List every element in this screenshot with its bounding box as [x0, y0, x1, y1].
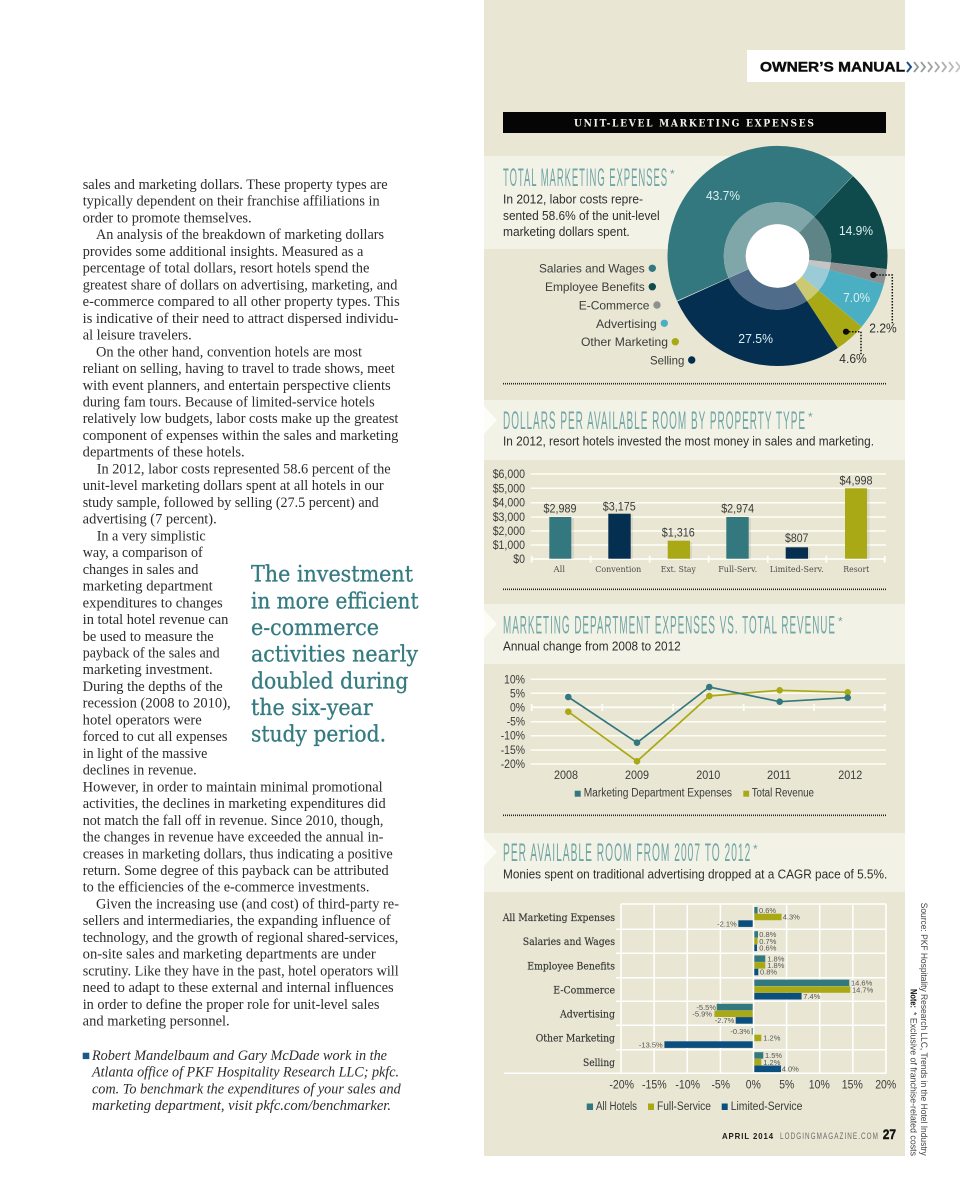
- bar chart: dollars per room by property type: $1,316: [662, 528, 695, 540]
- row: employee benefits: 1.8%: [767, 954, 785, 963]
- pie legend: [539, 262, 695, 368]
- row: all marketing expenses: -2.1%: [717, 919, 737, 928]
- row: e-commerce: [553, 979, 874, 1001]
- left article text: order to promote themselves.: [83, 210, 252, 226]
- row: salaries and wages: 0.8%: [759, 930, 777, 939]
- bar chart: dollars per room by property type: Resort: [843, 565, 870, 575]
- left article text: creases in marketing dollars, thus indicating a positive: [83, 846, 393, 862]
- left article text: advertising (7 percent).: [83, 512, 217, 528]
- intro text: total marketing expenses: In 2012, labor costs repre-: [503, 192, 643, 206]
- line chart: expenses vs revenue: 10%: [504, 674, 525, 686]
- pie legend: Salaries and Wages: [539, 262, 645, 276]
- line chart legend: [575, 788, 814, 800]
- row: salaries and wages: 0.7%: [759, 937, 777, 946]
- pie legend: Advertising: [596, 317, 657, 331]
- left article text: marketing investment.: [83, 662, 213, 678]
- horizontal bar legend: Limited-Service: [731, 1101, 802, 1113]
- bar chart: dollars per room by property type: Ext. Stay: [661, 565, 696, 575]
- row: e-commerce: 7.4%: [803, 992, 821, 1001]
- intro text: total marketing expenses: [503, 192, 660, 239]
- pull quote: The investment: [251, 563, 413, 588]
- bar chart: dollars per room by property type: $6,000: [493, 469, 525, 481]
- pie chart: marketing expenses: 43.7%: [706, 189, 740, 203]
- row: e-commerce: 14.6%: [851, 979, 873, 988]
- left article text: greatest share of dollars on advertising, marketing, and: [83, 277, 398, 293]
- left article text: is indicative of their need to attract dispersed individu-: [83, 311, 399, 327]
- row: all marketing expenses: 4.3%: [783, 913, 800, 922]
- bar chart: dollars per room by property type: $1,000: [493, 540, 525, 552]
- sidebar source note: * Exclusive of franchise-related costs: [908, 1012, 919, 1156]
- bar chart: dollars per room by property type: $3,175: [603, 501, 636, 513]
- row: advertising: -5.9%: [692, 1010, 712, 1018]
- line chart: expenses vs revenue: 2010: [696, 770, 720, 782]
- left article text: However, in order to maintain minimal promotional: [83, 779, 383, 795]
- heading: total marketing expenses: [503, 164, 675, 192]
- left article text: during fam tours. Because of limited-service hotels: [83, 394, 375, 410]
- left article text: in total hotel revenue can: [83, 612, 228, 628]
- left article text: An analysis of the breakdown of marketing dollars: [96, 227, 384, 243]
- left article text: changes in sales and: [83, 562, 199, 578]
- left article text: need to adapt to these external and internal influences: [83, 980, 394, 996]
- left article text: provides some additional insights. Measured as a: [83, 244, 364, 260]
- left article text: During the depths of the: [83, 679, 223, 695]
- pie chart: marketing expenses: 27.5%: [738, 332, 773, 346]
- horizontal bar legend: [587, 1101, 802, 1113]
- row: salaries and wages: 0.6%: [759, 944, 777, 952]
- row: all marketing expenses: All Marketing Expenses: [502, 913, 615, 924]
- row: selling: [583, 1051, 799, 1074]
- band: per available room header: [484, 833, 905, 892]
- left article text: way, a comparison of: [83, 545, 203, 561]
- line chart legend: Marketing Department Expenses: [584, 788, 732, 800]
- line chart legend: Total Revenue: [752, 788, 814, 800]
- footer: date, site and page number: 27: [883, 1126, 896, 1142]
- left article text: e-commerce compared to all other property types. This: [83, 294, 400, 310]
- bar chart: dollars per room by property type: $5,000: [493, 483, 525, 495]
- left article text: be used to measure the: [83, 629, 214, 645]
- sidebar source note: Source: PKF Hospitality Research LLC, Trends in the Hotel Industry: [918, 903, 929, 1156]
- x axis labels: 0%: [746, 1080, 761, 1092]
- left article text: scrutiny. Like they have in the past, hotel operators will: [83, 963, 399, 979]
- author bio: Atlanta office of PKF Hospitality Research LLC; pkfc.: [91, 1065, 399, 1081]
- row: advertising: -5.5%: [696, 1003, 716, 1012]
- left article text: payback of the sales and: [83, 646, 220, 662]
- x axis labels: 10%: [809, 1080, 830, 1092]
- left article text: sales and marketing dollars. These property types are: [83, 177, 388, 193]
- left article text: In 2012, labor costs represented 58.6 percent of the: [97, 461, 391, 477]
- footer: date, site and page number: [722, 1126, 896, 1142]
- horizontal bar legend: Full-Service: [657, 1101, 711, 1113]
- left article text: with event planners, and entertain perspective clients: [83, 378, 391, 394]
- row: advertising: -2.7%: [715, 1016, 735, 1025]
- line chart: expenses vs revenue: -10%: [501, 731, 525, 743]
- author bio: marketing department, visit pkfc.com/benchmarker.: [92, 1098, 391, 1114]
- row: selling: Selling: [583, 1058, 616, 1069]
- left article text: declines in revenue.: [83, 763, 197, 779]
- line chart: expenses vs revenue: -20%: [501, 759, 525, 771]
- callout: other marketing 4.6%: 4.6%: [839, 352, 867, 366]
- panel: right sidebar background: [484, 0, 905, 1156]
- left article text: forced to cut all expenses: [83, 729, 228, 745]
- left article text: and marketing personnel.: [83, 1014, 230, 1030]
- pie chart: marketing expenses: 7.0%: [843, 291, 870, 305]
- x axis labels: 5%: [779, 1080, 794, 1092]
- bar chart: dollars per room by property type: [493, 469, 886, 575]
- row: employee benefits: [527, 954, 785, 977]
- left article text: unit-level marketing dollars spent at all hotels in our: [83, 478, 384, 494]
- sidebar source note: Note:: [908, 989, 919, 1008]
- x axis labels: -10%: [675, 1080, 700, 1092]
- bar chart: dollars per room by property type: $807: [785, 533, 808, 545]
- pie chart: marketing expenses: 14.9%: [839, 224, 873, 238]
- tab: owner's manual: OWNER’S MANUAL: [760, 58, 905, 74]
- intro text: total marketing expenses: sented 58.6% of the unit-level: [503, 209, 660, 223]
- line chart: expenses vs revenue: 2009: [625, 770, 649, 782]
- left article text: technology, and the growth of regional shared-services,: [83, 930, 398, 946]
- left article text: not match the fall off in revenue. Since 2010, though,: [83, 813, 383, 829]
- left article text: in light of the massive: [83, 746, 207, 762]
- line chart: expenses vs revenue: 2008: [554, 770, 578, 782]
- left article text: [83, 177, 400, 1030]
- pull quote: in more efficient: [251, 589, 419, 614]
- heading: per available room: [503, 839, 758, 867]
- callout: other marketing 4.6%: [839, 329, 867, 366]
- footer: date, site and page number: LODGINGMAGAZINE.COM: [780, 1131, 879, 1141]
- left article text: activities, the declines in marketing expenditures did: [83, 796, 386, 812]
- row: salaries and wages: [523, 930, 777, 952]
- bar chart: dollars per room by property type: All: [553, 565, 565, 575]
- bar chart: dollars per room by property type: Full-Serv.: [718, 565, 757, 575]
- band: total marketing expenses header: [484, 156, 905, 249]
- subheading: dollars per available room: In 2012, resort hotels invested the most money in sales and marketing.: [503, 435, 874, 449]
- row: other marketing: Other Marketing: [536, 1034, 616, 1045]
- left article text: typically dependent on their franchise affiliations in: [83, 194, 380, 210]
- x axis labels: -20%: [609, 1080, 634, 1092]
- row: other marketing: -0.3%: [730, 1027, 750, 1036]
- text: TOTAL MARKETING EXPENSES: [503, 164, 668, 192]
- pie legend: Selling: [650, 354, 684, 368]
- x axis labels: -15%: [642, 1080, 667, 1092]
- bar chart: dollars per room by property type: Limited-Serv.: [770, 565, 824, 575]
- left article text: to the efficiencies of the e-commerce investments.: [83, 880, 369, 896]
- bar chart: dollars per room by property type: $4,000: [493, 498, 525, 510]
- pull quote: doubled during: [251, 669, 408, 694]
- callout: e-commerce 2.2%: [869, 272, 897, 336]
- band: marketing vs revenue header: [484, 604, 905, 664]
- row: selling: 1.2%: [763, 1058, 781, 1067]
- pull quote: [251, 563, 419, 748]
- row: advertising: Advertising: [559, 1009, 616, 1020]
- bar chart: dollars per room by property type: $3,000: [493, 512, 525, 524]
- bar chart: dollars per room by property type: $2,989: [544, 504, 576, 516]
- left article text: on-site sales and marketing departments are under: [83, 947, 376, 963]
- left article text: sellers and intermediaries, the expanding influence of: [83, 913, 391, 929]
- pull quote: study period.: [251, 723, 386, 748]
- x axis labels: [609, 1080, 896, 1092]
- bar chart: dollars per room by property type: $2,974: [721, 503, 755, 515]
- left article text: reliant on selling, having to travel to trade shows, meet: [83, 361, 395, 377]
- callout: e-commerce 2.2%: 2.2%: [869, 322, 897, 336]
- x axis labels: 15%: [842, 1080, 863, 1092]
- line chart: expenses vs revenue: -15%: [501, 745, 525, 757]
- line chart: expenses vs revenue: 5%: [510, 688, 525, 700]
- heading: dollars per available room: [503, 407, 813, 435]
- line chart: expenses vs revenue: -5%: [507, 717, 525, 729]
- row: employee benefits: 0.8%: [760, 968, 777, 977]
- left article text: expenditures to changes: [83, 595, 223, 611]
- row: all marketing expenses: [502, 906, 800, 928]
- row: e-commerce: E-Commerce: [553, 985, 615, 996]
- author bio: [83, 1048, 401, 1114]
- line chart: expenses vs revenue: 2011: [767, 770, 791, 782]
- sidebar source note: [908, 903, 929, 1156]
- title bar: unit-level marketing expenses: UNIT-LEVEL MARKETING EXPENSES: [574, 117, 816, 129]
- left article text: al leisure travelers.: [83, 328, 192, 344]
- left article text: recession (2008 to 2010),: [83, 696, 231, 712]
- line chart: expenses vs revenue: 0%: [510, 702, 525, 714]
- band: dollars per room header: [484, 400, 905, 460]
- row: other marketing: -13.5%: [639, 1040, 663, 1049]
- tab: owner's manual: [747, 50, 960, 82]
- row: employee benefits: Employee Benefits: [527, 961, 615, 972]
- pie legend: E-Commerce: [579, 298, 650, 312]
- left article text: percentage of total dollars, resort hotels spend the: [83, 261, 369, 277]
- pie chart: marketing expenses: [662, 140, 893, 372]
- line chart: expenses vs revenue: [501, 674, 886, 782]
- row: other marketing: 1.2%: [763, 1034, 781, 1043]
- left article text: component of expenses within the sales and marketing: [83, 428, 398, 444]
- pie legend: Employee Benefits: [545, 280, 645, 294]
- left article text: marketing department: [83, 579, 213, 595]
- row: selling: 4.0%: [782, 1064, 799, 1074]
- heading: marketing department expenses vs total revenue: *: [838, 614, 843, 628]
- left article text: On the other hand, convention hotels are most: [96, 344, 362, 360]
- bar chart: per available room by category: [502, 904, 896, 1092]
- row: employee benefits: 1.8%: [767, 961, 785, 970]
- left article text: relatively low budgets, labor costs make up the greatest: [83, 411, 398, 427]
- horizontal bar legend: All Hotels: [596, 1101, 637, 1113]
- author bio: com. To benchmark the expenditures of your sales and: [92, 1082, 401, 1098]
- left article text: the changes in revenue have exceeded the annual in-: [83, 830, 384, 846]
- row: e-commerce: 14.7%: [852, 985, 874, 994]
- bar chart: dollars per room by property type: $0: [513, 554, 525, 566]
- left article text: hotel operators were: [83, 712, 202, 728]
- row: selling: 1.5%: [765, 1051, 782, 1060]
- row: salaries and wages: Salaries and Wages: [523, 937, 615, 948]
- heading: total marketing expenses: *: [670, 167, 675, 181]
- x axis labels: -5%: [711, 1080, 730, 1092]
- row: advertising: [559, 1003, 753, 1025]
- pull quote: the six-year: [251, 696, 373, 721]
- subheading: annual change: Annual change from 2008 to 2012: [503, 640, 681, 654]
- row: all marketing expenses: 0.6%: [759, 906, 776, 915]
- left article text: Given the increasing use (and cost) of third-party re-: [96, 896, 399, 912]
- heading: per available room: *: [753, 842, 758, 856]
- title bar: unit-level marketing expenses: [503, 112, 886, 133]
- left article text: study sample, followed by selling (27.5 percent) and: [83, 495, 379, 511]
- left article text: departments of these hotels.: [83, 445, 245, 461]
- author bio: Robert Mandelbaum and Gary McDade work in the: [91, 1048, 388, 1064]
- bar chart: dollars per room by property type: Convention: [595, 565, 642, 575]
- heading: dollars per available room: *: [808, 410, 813, 424]
- x axis labels: 20%: [875, 1080, 896, 1092]
- pull quote: activities nearly: [251, 643, 419, 668]
- pull quote: e-commerce: [251, 616, 379, 641]
- subheading: CAGR: Monies spent on traditional advertising dropped at a CAGR pace of 5.5%.: [503, 867, 887, 881]
- pie legend: Other Marketing: [581, 335, 668, 349]
- bar chart: dollars per room by property type: $4,998: [840, 475, 872, 487]
- intro text: total marketing expenses: marketing dollars spent.: [503, 225, 630, 239]
- line chart: expenses vs revenue: 2012: [838, 770, 862, 782]
- bar chart: dollars per room by property type: $2,000: [493, 526, 525, 538]
- row: other marketing: [536, 1027, 781, 1049]
- left article text: in order to define the proper role for unit-level sales: [83, 997, 380, 1013]
- left article text: return. Some degree of this payback can be attributed: [83, 863, 389, 879]
- left article text: In a very simplistic: [97, 528, 206, 544]
- footer: date, site and page number: APRIL 2014: [722, 1131, 774, 1141]
